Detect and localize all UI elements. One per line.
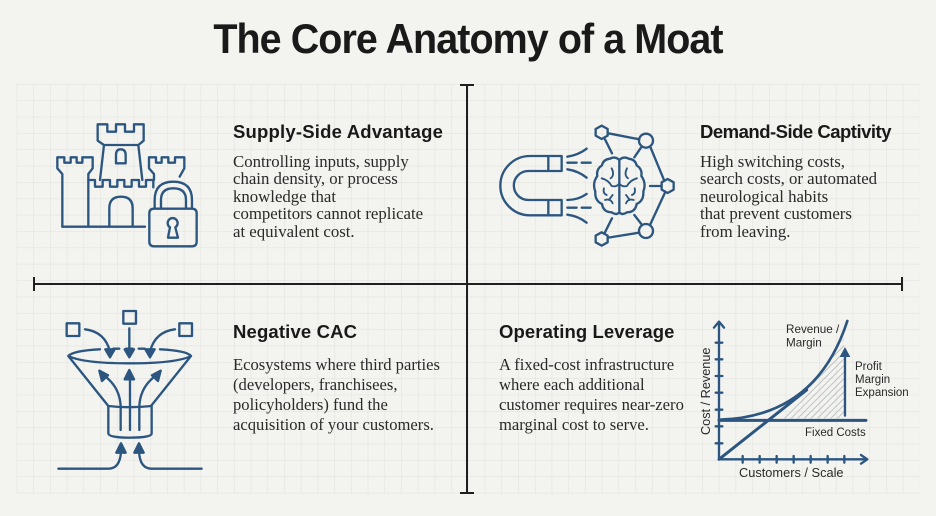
- body: that prevent customers: [700, 204, 852, 223]
- text: Expansion: [855, 387, 909, 399]
- body: marginal cost to serve.: [499, 415, 649, 434]
- body: at equivalent cost.: [233, 222, 355, 241]
- brain: [594, 158, 645, 214]
- panel text: operating leverage: [499, 321, 684, 434]
- chart label: y axis: Cost / Revenue: [699, 348, 713, 435]
- icon: castle with padlock: [57, 124, 197, 246]
- funnel body: [68, 349, 191, 438]
- body: customer requires near-zero: [499, 395, 684, 414]
- body: neurological habits: [700, 187, 828, 206]
- text: Margin: [786, 336, 822, 350]
- body: Ecosystems where third parties: [233, 355, 440, 374]
- body: where each additional: [499, 375, 645, 394]
- body: [700, 152, 877, 241]
- left tower: [57, 157, 93, 227]
- chart: operating leverage: [714, 321, 867, 464]
- magnet: [500, 156, 562, 215]
- horizontal divider: [34, 277, 902, 291]
- vertical divider: [460, 85, 474, 493]
- body: High switching costs,: [700, 152, 845, 171]
- hatched profit area: [784, 338, 844, 418]
- chart label: profit margin expansion: Profit: [855, 361, 883, 373]
- padlock: [149, 182, 197, 246]
- body: chain density, or process: [233, 169, 398, 188]
- input squares: [67, 311, 192, 336]
- body: Controlling inputs, supply: [233, 152, 409, 171]
- cost line: [719, 390, 807, 459]
- bottom feed arrows: [58, 452, 202, 469]
- body: knowledge that: [233, 187, 336, 206]
- text: Margin: [855, 374, 890, 386]
- fixed cost line: [719, 416, 866, 425]
- inbound arrows: [85, 328, 175, 352]
- curtain wall and gate: [62, 180, 153, 227]
- heading: Demand-Side Captivity: [700, 121, 891, 142]
- body: A fixed-cost infrastructure: [499, 355, 674, 374]
- margin arrow: [841, 355, 848, 416]
- body: (developers, franchisees,: [233, 375, 397, 394]
- axes and ticks: [714, 322, 867, 464]
- magnetic field lines: [567, 149, 591, 223]
- icon: magnet, brain and network: [500, 126, 674, 246]
- chart label: x axis: Customers / Scale: [739, 465, 844, 480]
- heading: Supply-Side Advantage: [233, 121, 443, 142]
- body: acquisition of your customers.: [233, 415, 434, 434]
- panel text: negative cac: [233, 321, 440, 434]
- right tower: [149, 157, 184, 180]
- body: from leaving.: [700, 222, 790, 241]
- heading: Negative CAC: [233, 321, 357, 342]
- body: [233, 152, 423, 241]
- body: search costs, or automated: [700, 169, 877, 188]
- inner arrows: [103, 375, 157, 430]
- centre tower: [98, 124, 144, 180]
- panel text: supply-side advantage: [233, 121, 443, 241]
- chart label: revenue / margin: Revenue /: [786, 323, 840, 336]
- body: [499, 355, 684, 434]
- body: competitors cannot replicate: [233, 204, 423, 223]
- chart label: fixed costs: Fixed Costs: [805, 427, 866, 439]
- body: [233, 355, 440, 434]
- network nodes and links: [596, 126, 674, 246]
- body: policyholders) fund the: [233, 395, 388, 414]
- revenue curve: [719, 321, 847, 420]
- panel text: demand-side captivity: [700, 121, 892, 241]
- heading: Operating Leverage: [499, 321, 675, 342]
- title: The Core Anatomy of a Moat: [213, 15, 723, 62]
- icon: funnel with ecosystem flows: [58, 311, 202, 469]
